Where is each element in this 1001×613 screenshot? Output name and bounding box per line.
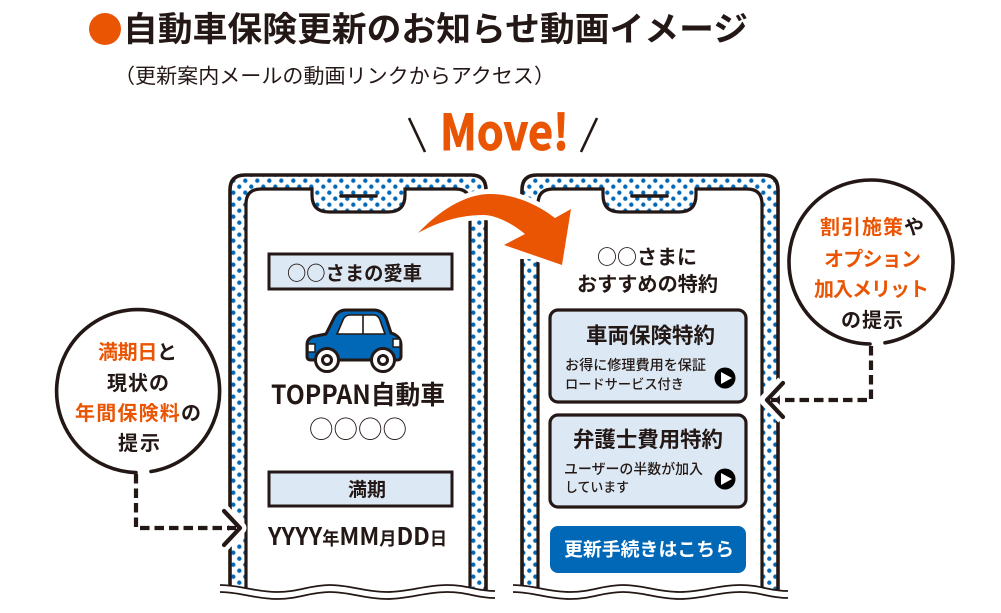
callout: right (766, 180, 953, 418)
wavy cut edge (513, 585, 788, 613)
icon: play button (714, 468, 736, 490)
car grade placeholder: ○○○○ (309, 411, 407, 446)
card: lawyer fee: しています (565, 476, 629, 496)
callout circle (789, 180, 953, 344)
callout text: 加入メリット (814, 273, 929, 302)
card: vehicle insurance (550, 310, 746, 402)
wavy cut edge (220, 585, 495, 613)
callout text: 年間保険料の (75, 397, 201, 426)
card: lawyer fee (550, 415, 746, 507)
left slash (409, 118, 425, 152)
dashed arrow (136, 474, 240, 546)
callout text: オプション (824, 243, 921, 272)
dashed arrow (766, 346, 871, 418)
panel: left phone (220, 175, 495, 613)
card: lawyer fee: 弁護士費用特約 (573, 423, 723, 454)
label: expiry: 満期 (348, 475, 386, 502)
card: lawyer fee: ユーザーの半数が加入 (564, 459, 703, 479)
callout text: の提示 (841, 304, 903, 333)
recommendation heading: おすすめの特約 (577, 268, 718, 297)
title (89, 2, 748, 51)
callout: left (57, 310, 240, 546)
move heading (409, 94, 597, 165)
callout text (814, 211, 929, 333)
label: expiry (269, 472, 452, 506)
label: owner's car (269, 254, 452, 289)
recommendation heading: ○○さまに (597, 241, 697, 270)
car name: TOPPAN自動車 (271, 375, 445, 412)
arrow: left phone to right phone (418, 194, 571, 265)
move text: Move! (440, 94, 569, 165)
icon: orange bullet (89, 13, 121, 45)
callout text: 現状の (107, 367, 169, 396)
callout circle (57, 310, 220, 472)
panel: right phone (513, 175, 788, 613)
card: vehicle insurance: 車両保険特約 (586, 319, 715, 350)
recommendation heading (577, 241, 718, 297)
callout text: 提示 (118, 427, 160, 456)
icon: play button (714, 368, 736, 388)
right slash (581, 118, 597, 152)
phone frame (230, 175, 486, 596)
subtitle: （更新案内メールの動画リンクからアクセス） (114, 59, 555, 89)
icon: blue car (307, 310, 401, 372)
phone frame (522, 175, 778, 596)
callout text: 割引施策や (820, 211, 924, 240)
renewal button: 更新手続きはこちら (564, 535, 734, 562)
renewal button (550, 526, 746, 573)
card: vehicle insurance: ロードサービス付き (565, 373, 684, 393)
callout text (75, 336, 201, 456)
callout text: 満期日と (98, 336, 177, 365)
label: owner's car: ○○さまの愛車 (287, 258, 422, 286)
title text: 自動車保険更新のお知らせ動画イメージ (123, 2, 748, 51)
expiry date: YYYY年MM月DD日 (267, 518, 447, 553)
card: vehicle insurance: お得に修理費用を保証 (565, 355, 706, 375)
